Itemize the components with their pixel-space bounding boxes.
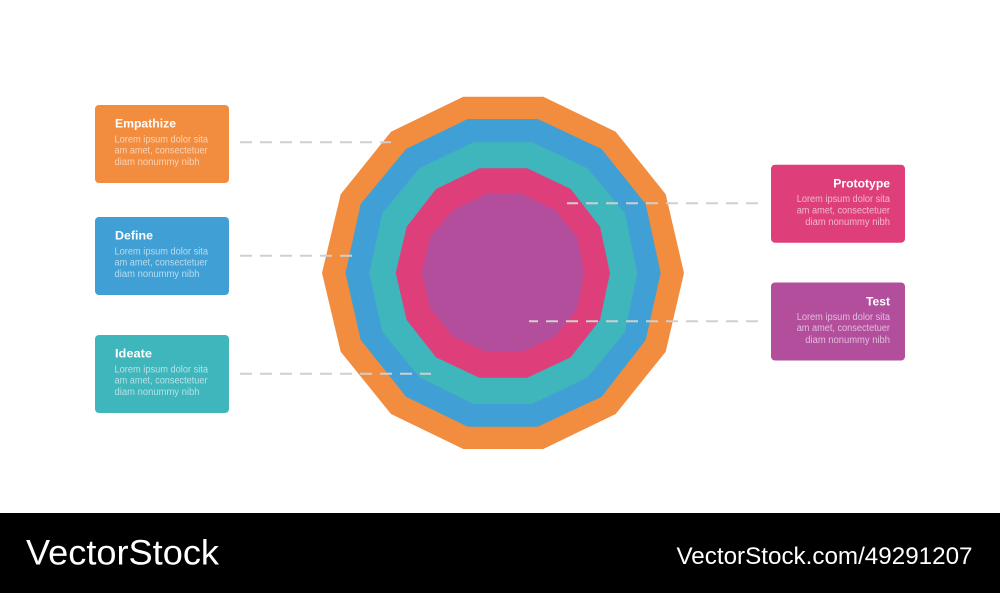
layer: prototype pink polygon xyxy=(396,168,610,378)
card: Test: Lorem ipsum dolor sita xyxy=(797,312,890,323)
card: Empathize: am amet, consectetuer xyxy=(114,146,208,157)
connector: test xyxy=(529,320,758,322)
layer: define blue polygon xyxy=(346,119,661,427)
card: Empathize xyxy=(95,105,229,183)
layer: empathize orange polygon xyxy=(322,97,684,449)
card: Empathize: Lorem ipsum dolor sita xyxy=(114,134,208,145)
card: Prototype: diam nonummy nibh xyxy=(805,217,890,228)
footer image URL text: VectorStock.com/49291207 xyxy=(676,543,972,570)
card: Ideate: Ideate xyxy=(115,349,152,361)
card: Define: Define xyxy=(115,231,153,243)
connector: define xyxy=(240,255,352,257)
card: Test: Test xyxy=(866,296,890,308)
card: Test: diam nonummy nibh xyxy=(805,335,890,346)
connector: empathize xyxy=(240,141,391,143)
card: Ideate: am amet, consectetuer xyxy=(114,376,208,387)
footer watermark bar xyxy=(0,513,1000,593)
card: Prototype: Lorem ipsum dolor sita xyxy=(797,194,890,205)
card: Define: Lorem ipsum dolor sita xyxy=(114,246,208,257)
card: Empathize: Empathize xyxy=(115,119,176,131)
card: Test xyxy=(771,282,905,360)
card: Prototype: am amet, consectetuer xyxy=(797,205,891,216)
card: Define: am amet, consectetuer xyxy=(114,258,208,269)
layer: test purple polygon xyxy=(422,194,584,352)
card: Ideate: diam nonummy nibh xyxy=(114,387,200,398)
layer: ideate teal polygon xyxy=(369,142,637,404)
footer logo text: VectorStock xyxy=(26,534,220,572)
card: Ideate: Lorem ipsum dolor sita xyxy=(114,364,208,375)
card: Empathize: diam nonummy nibh xyxy=(114,157,200,168)
card: Ideate xyxy=(95,335,229,413)
card: Test: am amet, consectetuer xyxy=(797,323,891,334)
card: Prototype xyxy=(771,165,905,243)
connector: prototype xyxy=(567,202,758,204)
concentric polygon diagram xyxy=(322,97,684,449)
card: Define xyxy=(95,217,229,295)
card: Define: diam nonummy nibh xyxy=(114,269,200,280)
connector: ideate xyxy=(240,373,431,375)
card: Prototype: Prototype xyxy=(833,178,890,190)
